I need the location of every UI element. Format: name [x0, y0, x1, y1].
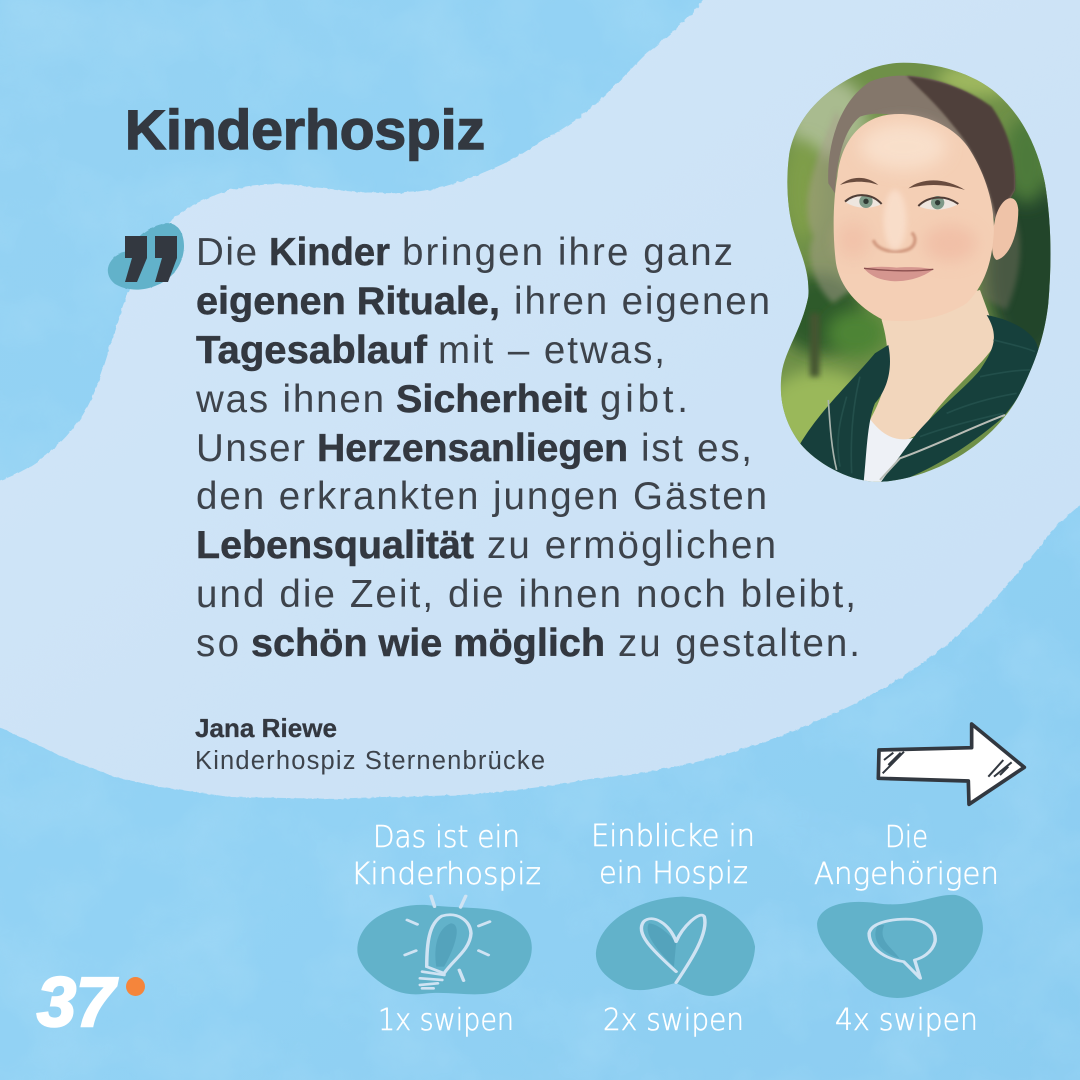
eyes: [845, 195, 958, 210]
wispy hair: [806, 114, 850, 304]
quote text: ist es,: [641, 427, 752, 470]
face: [834, 114, 994, 321]
icon: light bulb: [357, 896, 532, 994]
quote text: Herzensanliegen: [317, 427, 628, 470]
quote text: Kinder: [269, 231, 390, 274]
navigation: three swipe hints: [351, 819, 999, 1038]
nav item: Die Angehörigen: 4x swipen: [835, 1003, 978, 1038]
nose shadow: [873, 233, 915, 252]
attribution: Kinderhospiz Sternenbrücke: [195, 747, 545, 775]
quote text: gibt.: [600, 378, 688, 421]
nav item: Das ist ein Kinderhospiz: Kinderhospiz: [351, 857, 541, 892]
icon: white hand-drawn arrow: [878, 724, 1024, 804]
attribution: [195, 713, 545, 775]
quote text: was ihnen: [195, 378, 384, 421]
quote text: eigenen Rituale,: [196, 280, 500, 323]
icon: speech bubble: [817, 895, 983, 998]
nav item: Das ist ein Kinderhospiz: Das ist ein: [373, 820, 520, 855]
quote text: Tagesablauf: [196, 329, 427, 372]
logo: 37 degrees: 37: [37, 963, 118, 1041]
nav item: Die Angehörigen: [814, 820, 999, 1038]
jacket: [797, 345, 890, 485]
shirt: [861, 419, 914, 482]
eyebrows: [840, 178, 965, 190]
quote text: Die: [196, 231, 257, 274]
title: Kinderhospiz: [125, 98, 485, 161]
quote text: so: [196, 622, 239, 665]
quote text: zu gestalten.: [618, 622, 860, 665]
quote text: zu ermöglichen: [487, 524, 776, 567]
quote text: Sicherheit: [396, 378, 587, 421]
nav item: Einblicke in ein Hospiz: 2x swipen: [603, 1003, 744, 1038]
quote text: mit – etwas,: [438, 329, 665, 372]
icon: quotation marks: [108, 223, 184, 290]
attribution: Jana Riewe: [195, 713, 337, 743]
quote text: ihren eigenen: [514, 280, 770, 323]
nav item: Einblicke in ein Hospiz: Einblicke in: [591, 819, 755, 854]
ear: [992, 198, 1018, 260]
photo background: [780, 62, 1050, 482]
neck: [870, 290, 998, 447]
quote text: den erkrankten jungen Gästen: [196, 475, 767, 518]
photo: portrait of Jana Riewe: [780, 62, 1050, 482]
nav item: Einblicke in ein Hospiz: [591, 819, 755, 1038]
quote text: bringen ihre ganz: [402, 231, 733, 274]
nav item: Einblicke in ein Hospiz: ein Hospiz: [599, 856, 748, 891]
icon: heart: [596, 897, 755, 996]
nav item: Das ist ein Kinderhospiz: 1x swipen: [378, 1003, 514, 1038]
quote text: Unser: [196, 427, 305, 470]
quote text: und die Zeit, die ihnen noch bleibt,: [196, 573, 856, 616]
quote text: Lebensqualität: [196, 524, 474, 567]
panel: pale torn-paper shape: [0, 0, 1080, 799]
nav item: Die Angehörigen: Angehörigen: [814, 857, 999, 892]
lips: [864, 267, 933, 281]
nav item: Das ist ein Kinderhospiz: [351, 820, 541, 1038]
quote text: schön wie möglich: [251, 622, 605, 665]
hair: [828, 76, 1015, 223]
quote text: [195, 231, 860, 665]
nav item: Die Angehörigen: Die: [885, 820, 928, 855]
